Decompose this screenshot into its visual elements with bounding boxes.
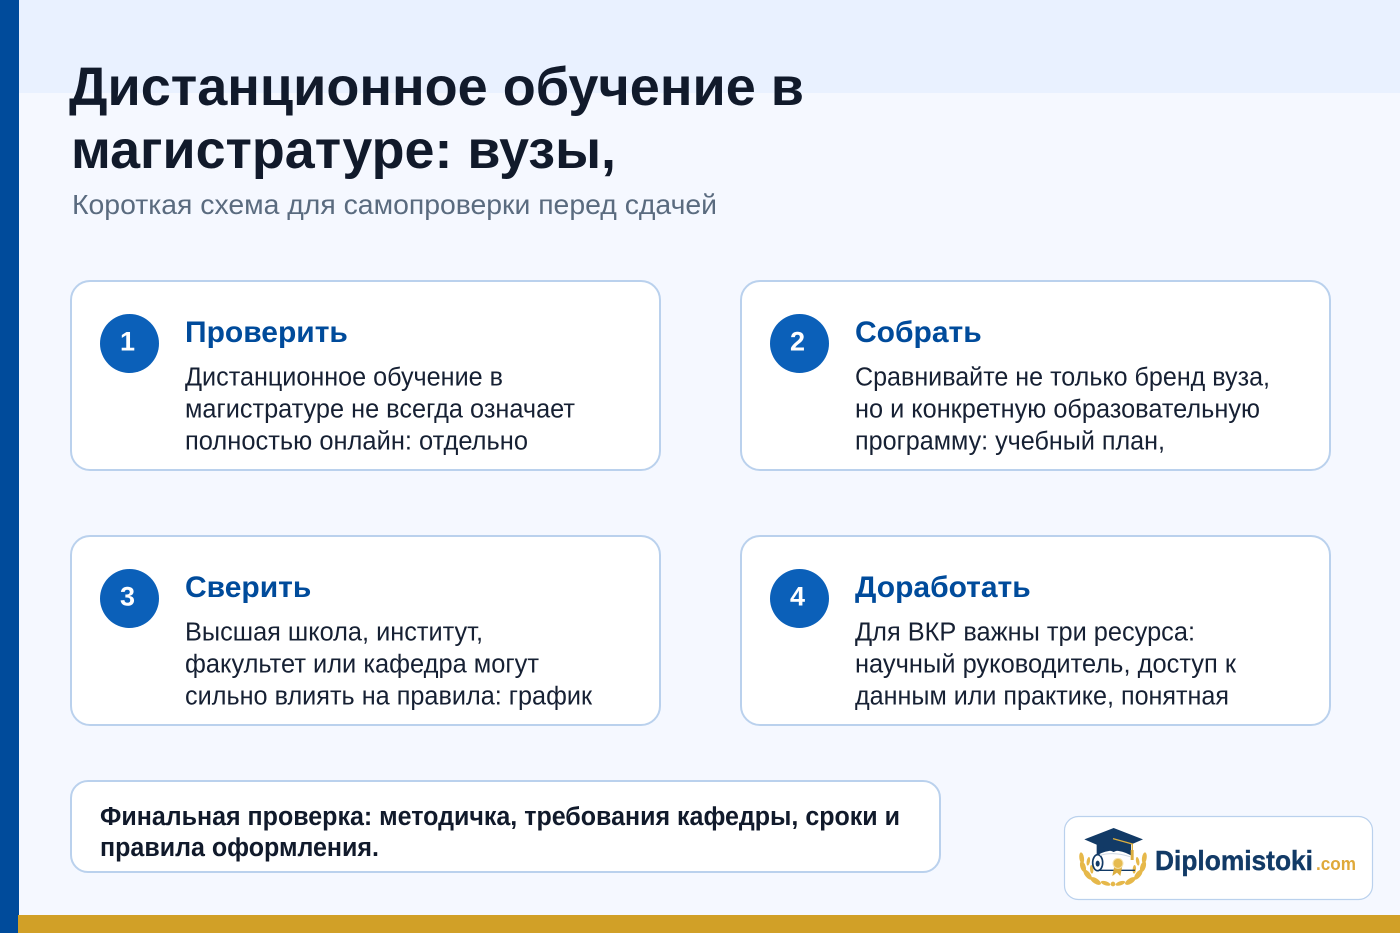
- text block: step 4: [855, 618, 1237, 710]
- left accent bar: [0, 0, 19, 933]
- bottom accent bar: [18, 915, 1400, 933]
- text block: step 2: но и конкретную образовательную: [855, 396, 1260, 424]
- heading: step 1: Проверить: [185, 316, 348, 349]
- text block: step 1: магистратуре не всегда означает: [185, 396, 575, 424]
- title: магистратуре: вузы,: [71, 120, 616, 180]
- text block: step 2: Сравнивайте не только бренд вуза,: [855, 364, 1270, 392]
- icon: number 2: [770, 314, 829, 373]
- panel: step 4: [741, 536, 1330, 725]
- icon: number 3: 3: [120, 582, 135, 612]
- text block: step 1: Дистанционное обучение в: [185, 364, 503, 392]
- title: Дистанционное обучение в: [69, 57, 804, 117]
- callout: final check: правила оформления.: [100, 834, 379, 862]
- heading: step 4: Доработать: [855, 571, 1031, 604]
- icon: number 1: [100, 314, 159, 373]
- panel: step 1: [71, 281, 660, 470]
- logo card: [1064, 816, 1372, 900]
- title: [69, 57, 804, 180]
- subtitle: Короткая схема для самопроверки перед сдачей: [72, 189, 717, 220]
- callout: final check: Финальная проверка: методичка, требования кафедры, сроки и: [100, 803, 900, 831]
- text block: step 3: сильно влиять на правила: график: [185, 682, 593, 710]
- text block: step 1: [185, 364, 575, 456]
- panel: step 2: [741, 281, 1330, 470]
- icon: number 3: [100, 569, 159, 628]
- icon: number 4: [770, 569, 829, 628]
- text block: step 3: Высшая школа, институт,: [185, 618, 483, 646]
- text block: step 4: данным или практике, понятная: [855, 682, 1229, 710]
- logo domain: .com: [1316, 853, 1356, 874]
- text block: step 2: программу: учебный план,: [855, 428, 1165, 456]
- logo wordmark: Diplomistoki: [1155, 845, 1313, 876]
- panel: step 3: [71, 536, 660, 725]
- icon: number 1: 1: [120, 326, 135, 356]
- text block: step 4: Для ВКР важны три ресурса:: [855, 618, 1195, 646]
- callout: final check: [71, 781, 940, 872]
- text block: step 4: научный руководитель, доступ к: [855, 650, 1237, 678]
- icon: number 2: 2: [790, 326, 805, 356]
- icon: graduation cap with laurel: [1079, 828, 1147, 887]
- icon: number 4: 4: [790, 582, 805, 612]
- text block: step 1: полностью онлайн: отдельно: [185, 428, 528, 456]
- text block: step 3: [185, 618, 593, 710]
- heading: step 3: Сверить: [185, 571, 311, 604]
- heading: step 2: Собрать: [855, 316, 982, 349]
- text block: step 3: факультет или кафедра могут: [185, 650, 539, 678]
- text block: step 2: [855, 364, 1270, 456]
